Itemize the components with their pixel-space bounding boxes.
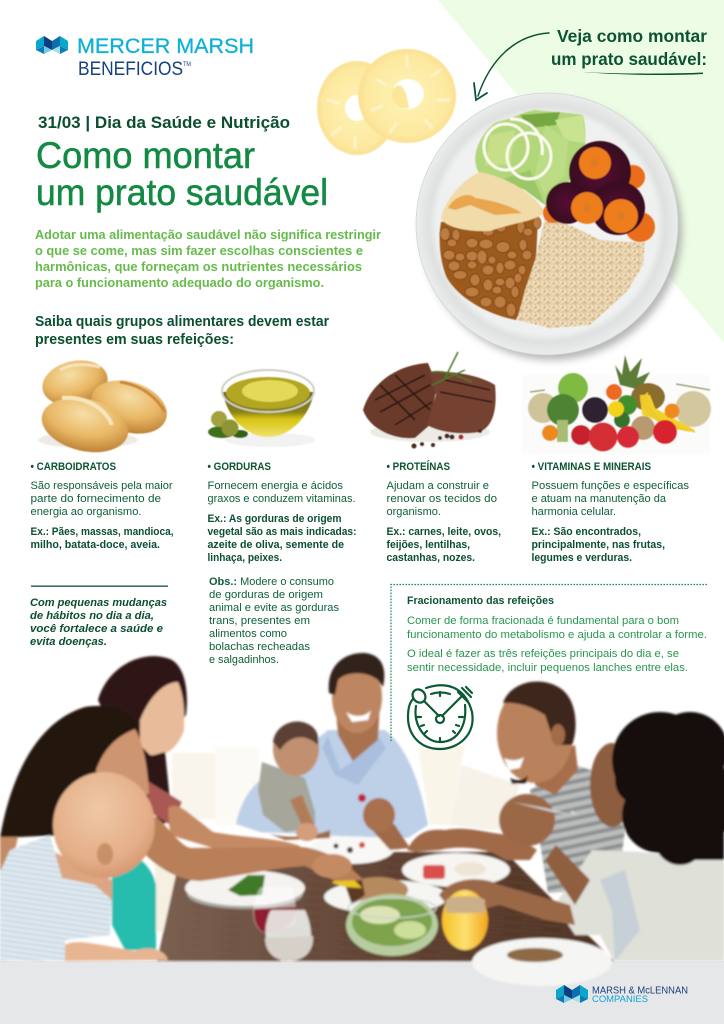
- panel: meal fractioning: [391, 584, 707, 749]
- column: vitaminas e minerais: harmonia celular.: [532, 506, 616, 518]
- brand name: MERCER MARSH: [77, 35, 254, 58]
- beets: [546, 141, 645, 235]
- baby centre: [258, 721, 330, 841]
- woman behind: hair and face: [98, 656, 300, 852]
- title: Como montar: [36, 135, 255, 176]
- arrow to plate: [474, 33, 549, 100]
- sofa: [155, 745, 520, 932]
- column: carboidratos: energia ao organismo.: [30, 506, 142, 518]
- column: proteinas: castanhas, nozes.: [386, 552, 475, 564]
- intro paragraph: para o funcionamento adequado do organismo.: [35, 275, 324, 290]
- column: vitaminas e minerais: Possuem funções e específicas: [532, 480, 689, 492]
- icon: clock with spoon and fork: [408, 685, 473, 749]
- callout: see how to build a plate: [551, 26, 707, 69]
- family photo: [0, 653, 724, 986]
- column: proteinas: Ajudam a construir e: [386, 480, 489, 492]
- column: gorduras: • GORDURAS: [208, 461, 271, 473]
- note: obs: alimentos como: [209, 628, 287, 640]
- column: gorduras: azeite de oliva, semente de: [208, 539, 344, 551]
- chicken: [441, 172, 545, 231]
- column: vitaminas e minerais: • VITAMINAS E MINERAIS: [532, 461, 651, 473]
- background: mint triangle: [438, 0, 724, 343]
- onion rings: [484, 119, 551, 179]
- intro paragraph: [35, 227, 381, 290]
- column: proteinas: • PROTEÍNAS: [386, 460, 450, 473]
- baby front left: [0, 772, 168, 961]
- brand subtitle: TM: [183, 62, 191, 68]
- column: gorduras: [208, 461, 356, 666]
- lettuce: [475, 110, 586, 208]
- plate illustration: [416, 93, 682, 360]
- icon: logo mark: [36, 36, 68, 54]
- note: obs: de gorduras de origem: [209, 589, 323, 601]
- subheading: food groups: presentes em suas refeições:: [35, 332, 234, 348]
- column: proteinas: organismo.: [386, 506, 441, 518]
- woman front: hair, face, teal shirt: [0, 706, 363, 950]
- note: obs: bolachas recheadas: [209, 641, 310, 653]
- woman right: [439, 712, 724, 961]
- column: proteinas: [386, 460, 501, 564]
- column: gorduras: Fornecem energia e ácidos: [208, 480, 343, 492]
- column: carboidratos: [30, 461, 174, 551]
- panel: meal fractioning: funcionamento do metabolismo e ajuda a controlar a forme.: [407, 629, 707, 641]
- panel: meal fractioning: O ideal é fazer as três refeições principais do dia e, se: [407, 648, 679, 660]
- food image: fruits and vegetables: [522, 355, 711, 455]
- column: vitaminas e minerais: legumes e verduras.: [532, 552, 632, 564]
- note: obs: animal e evite as gorduras: [209, 602, 339, 614]
- pineapple slices: [317, 49, 456, 155]
- footer band: [0, 961, 724, 1024]
- title: um prato saudável: [36, 172, 328, 213]
- company suffix: COMPANIES: [592, 994, 648, 1005]
- man centre: [236, 653, 428, 850]
- title: [36, 135, 328, 213]
- carrots behind: [543, 165, 655, 242]
- back plates and food: [185, 834, 510, 914]
- rice: [517, 218, 645, 328]
- intro paragraph: Adotar uma alimentação saudável não significa restringir: [35, 227, 381, 242]
- food image: steaks: [363, 352, 496, 448]
- column: gorduras: Ex.: As gorduras de origem: [208, 513, 342, 525]
- column: vitaminas e minerais: principalmente, nas frutas,: [532, 539, 665, 551]
- callout: small changes: Com pequenas mudanças: [30, 597, 167, 609]
- column: carboidratos: • CARBOIDRATOS: [30, 461, 116, 473]
- column: vitaminas e minerais: [532, 461, 689, 564]
- callout: see how to build a plate: Veja como montar: [557, 26, 707, 46]
- callout: small changes: evita doenças.: [30, 636, 107, 648]
- note: obs: [209, 576, 339, 666]
- note: obs: e salgadinhos.: [209, 654, 279, 666]
- callout: small changes: de hábitos no dia a dia,: [30, 610, 154, 622]
- brand subtitle: BENEFICIOS: [78, 59, 193, 80]
- intro paragraph: harmônicas, que forneçam os nutrientes necessários: [35, 259, 362, 274]
- company name: MARSH & McLENNAN: [592, 986, 688, 996]
- icon: logo mark: [556, 985, 588, 1003]
- subheading: food groups: Saiba quais grupos alimentares devem estar: [35, 314, 329, 330]
- panel: meal fractioning: Fracionamento das refeições: [407, 595, 554, 607]
- logo: Marsh & McLennan Companies: [556, 985, 688, 1005]
- column: gorduras: linhaça, peixes.: [208, 552, 282, 564]
- dining table: [157, 852, 614, 961]
- column: vitaminas e minerais: e atuam na manutenção da: [532, 493, 667, 505]
- column: proteinas: renovar os tecidos do: [386, 493, 497, 505]
- column: proteinas: feijões, lentilhas,: [386, 539, 470, 551]
- column: carboidratos: Ex.: Pães, massas, mandioca,: [30, 526, 174, 538]
- food image: bread rolls: [36, 355, 174, 460]
- carrots: [571, 147, 638, 233]
- column: carboidratos: São responsáveis pela maior: [30, 480, 173, 492]
- column: proteinas: Ex.: carnes, leite, ovos,: [386, 526, 501, 538]
- column: gorduras: graxos e conduzem vitaminas.: [208, 493, 356, 505]
- front tableware: bowl, glasses, plate: [253, 887, 612, 986]
- date line: 31/03 | Dia da Saúde e Nutrição: [38, 114, 290, 132]
- plate: [416, 93, 682, 360]
- panel: meal fractioning: sentir necessidade, incluir pequenos lanches entre elas.: [407, 662, 688, 674]
- callout underline: [583, 72, 703, 75]
- panel: meal fractioning: Comer de forma fracionada é fundamental para o bom: [407, 615, 679, 627]
- intro paragraph: o que se come, mas sim fazer escolhas conscientes e: [35, 243, 363, 258]
- column: carboidratos: milho, batata-doce, aveia.: [30, 539, 160, 551]
- column: vitaminas e minerais: Ex.: São encontrados,: [532, 526, 641, 538]
- column: gorduras: vegetal são as mais indicadas:: [208, 526, 356, 538]
- callout: small changes: [30, 586, 168, 648]
- man right: [407, 681, 625, 893]
- logo: Mercer Marsh Benefícios: [36, 35, 254, 80]
- subheading: food groups: [35, 314, 329, 348]
- food image: olive oil: [208, 370, 315, 447]
- callout: small changes: você fortalece a saúde e: [30, 623, 163, 635]
- note: obs: Obs.: Modere o consumo: [209, 576, 334, 588]
- callout: see how to build a plate: um prato saudável:: [551, 49, 707, 69]
- column: carboidratos: parte do fornecimento de: [30, 493, 161, 505]
- note: obs: trans, presentes em: [209, 615, 310, 627]
- beans: [440, 217, 541, 320]
